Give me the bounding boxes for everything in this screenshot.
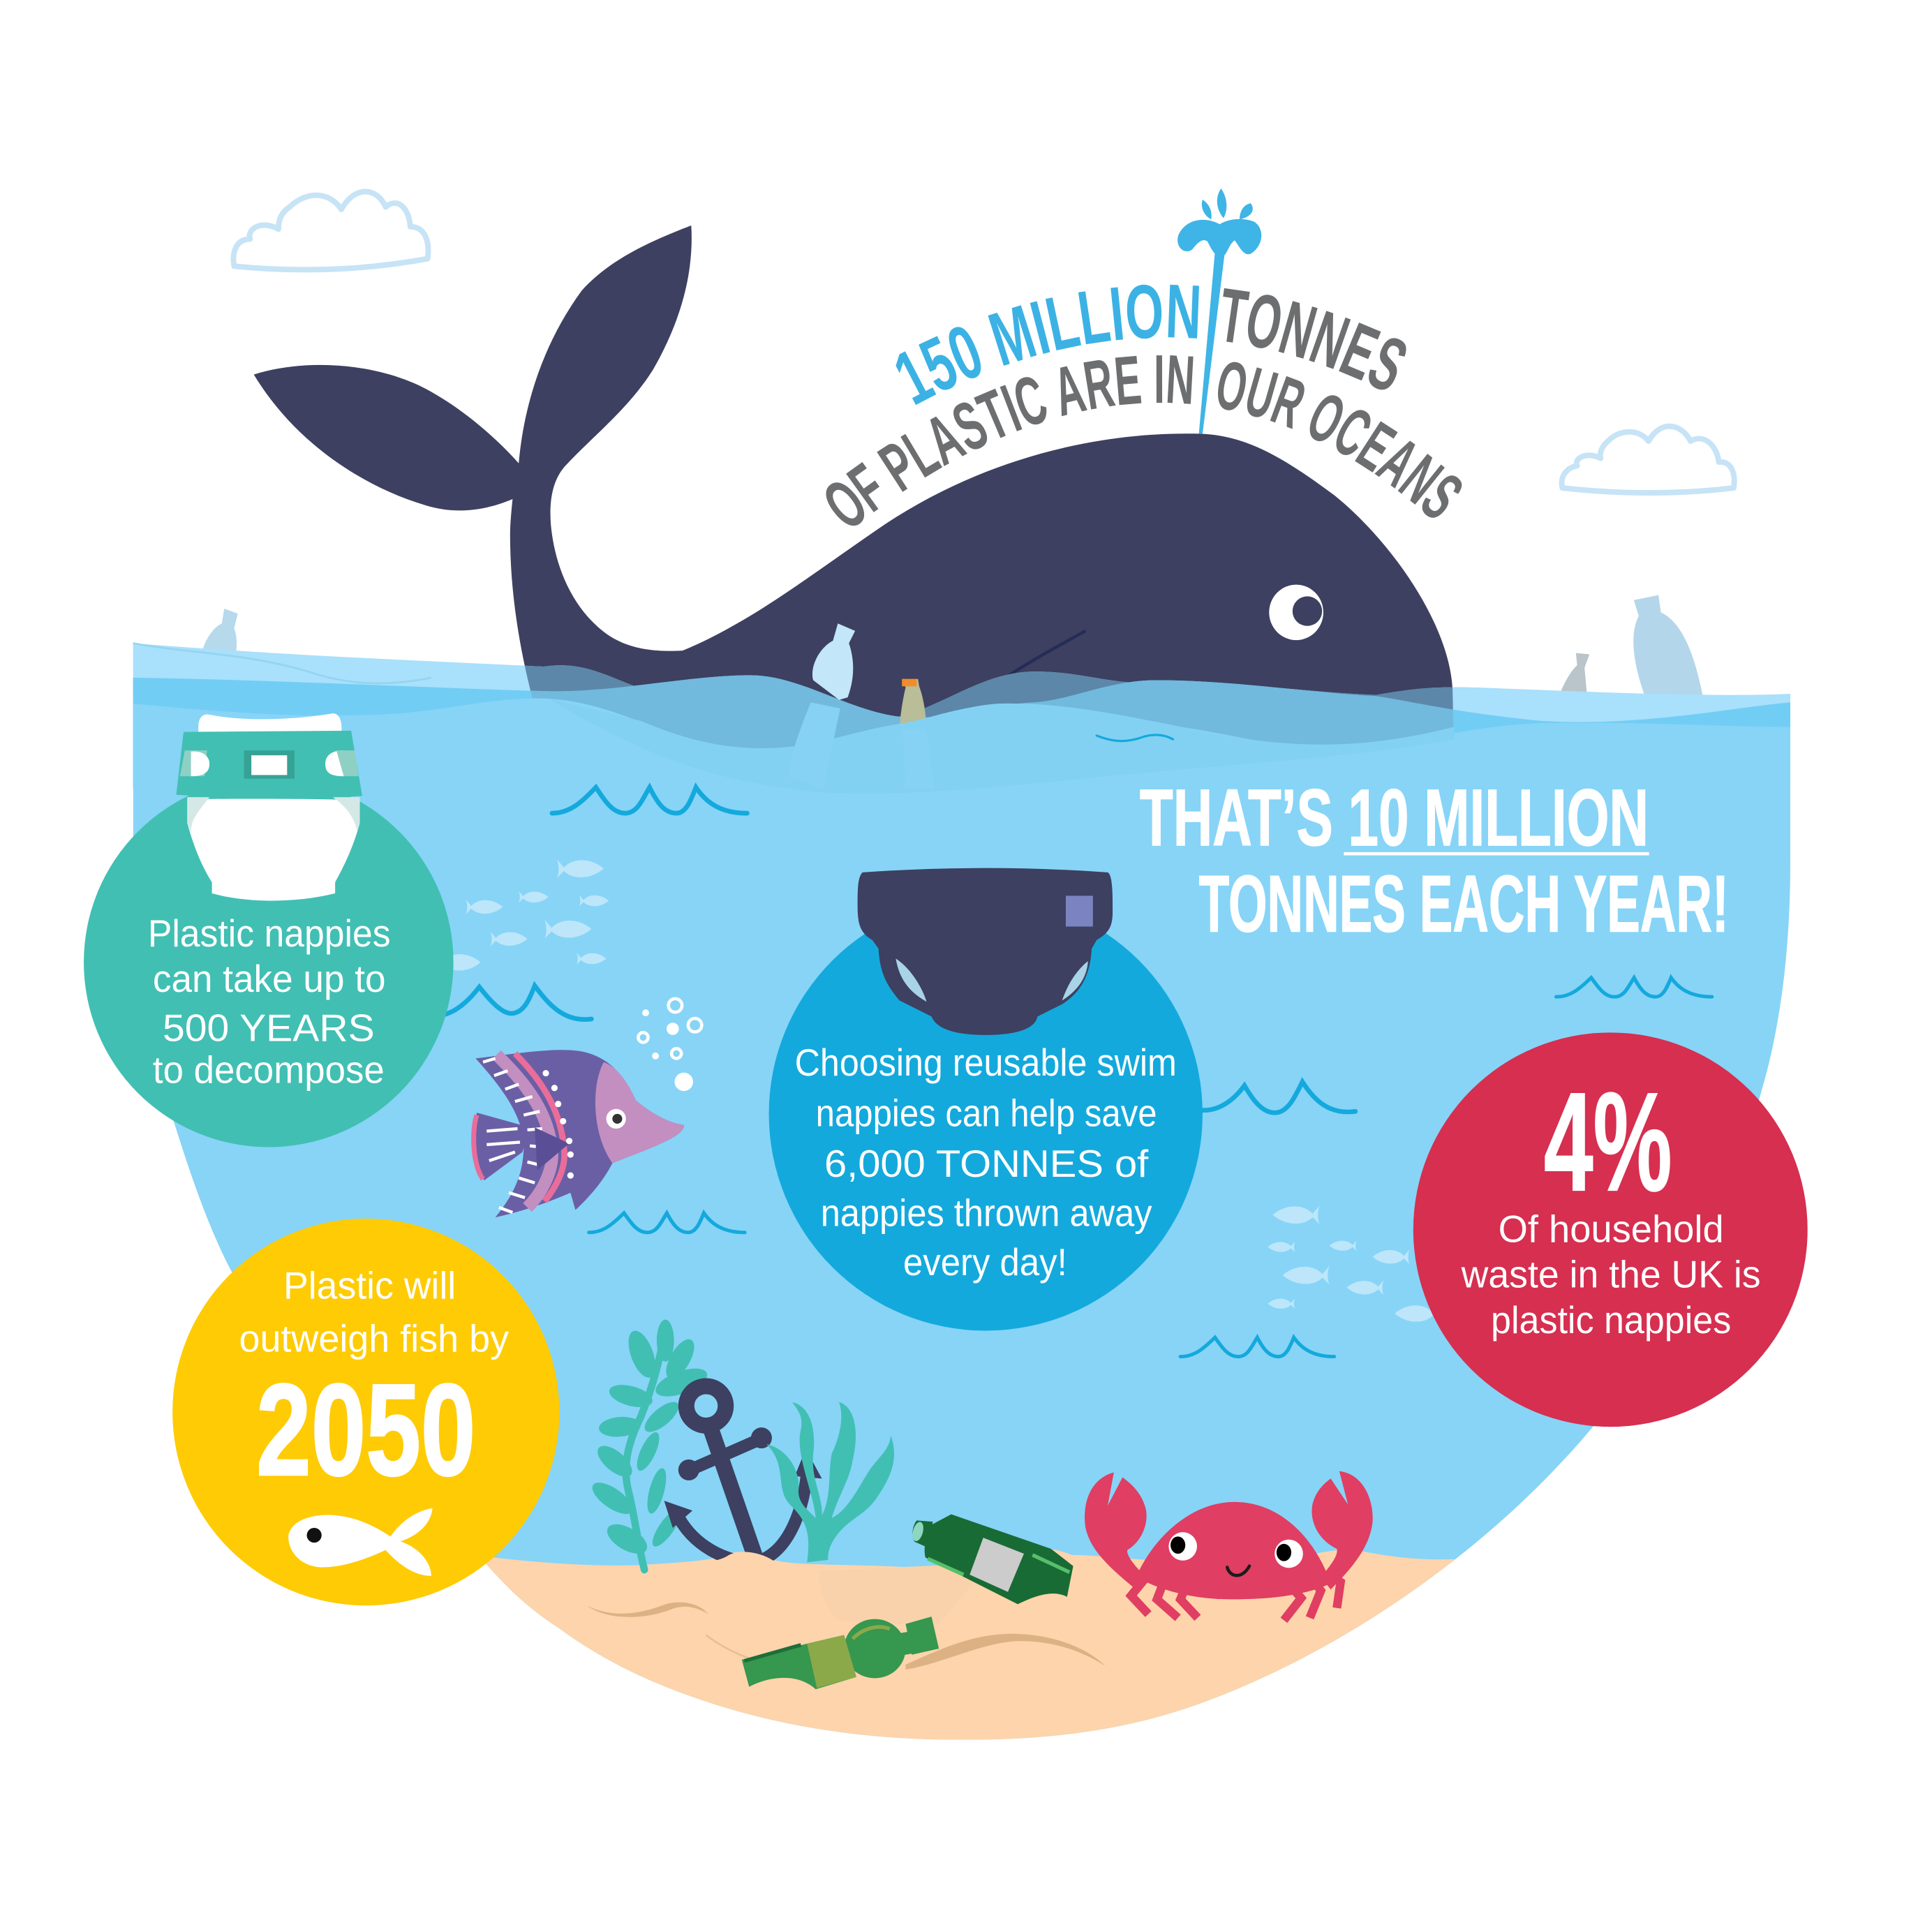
whale [254, 225, 1454, 752]
anchor [664, 1386, 822, 1562]
figure: 2050: 2050 [256, 1357, 475, 1503]
cloud left [234, 192, 428, 269]
text: choosing reusable swim nappies: every day! [903, 1240, 1067, 1284]
headline: 150 million tonnes of plastic are in our oceans: OUR OCEANS [1218, 362, 1462, 518]
panel: reusable swim nappies [769, 868, 1203, 1331]
text: choosing reusable swim nappies: 6,000 TONNES of [824, 1142, 1149, 1185]
text: plastic nappies 500 years: 500 YEARS [163, 1006, 375, 1050]
text: choosing reusable swim nappies: nappies can help save [816, 1091, 1157, 1134]
text: of household waste: waste in the UK is [1461, 1253, 1761, 1296]
ripple waves [419, 735, 1712, 1357]
text: plastic will outweigh fish by [239, 1264, 510, 1360]
seaweed right [766, 1402, 894, 1562]
icon: white plastic nappy [176, 713, 362, 900]
fish school right [1268, 1205, 1439, 1323]
panel: that's 10 million tonnes each year [1140, 773, 1729, 949]
crab [1085, 1471, 1373, 1620]
water surface back layer [133, 642, 1790, 789]
text: of household waste: Of household [1499, 1207, 1724, 1250]
text: plastic will outweigh fish by: Plastic will [283, 1264, 456, 1307]
panel: 4 percent household waste [1413, 1032, 1808, 1427]
text: of household waste [1461, 1207, 1761, 1342]
figure: 4%: 4% [1544, 1063, 1672, 1220]
headline: 150 million tonnes of plastic are in our oceans: 150 MILLION [896, 285, 1199, 405]
sand [486, 1549, 1456, 1739]
text: choosing reusable swim nappies [795, 1041, 1177, 1284]
panel: 500 years decomposition [84, 713, 454, 1147]
icon: purple tropical fish [474, 1050, 684, 1217]
cloud right [1562, 426, 1734, 493]
icon: navy swim nappy [858, 868, 1113, 1035]
sand mound over anchor [690, 1552, 801, 1577]
text: choosing reusable swim nappies: nappies thrown away [821, 1191, 1152, 1234]
water surface middle layer [133, 675, 1790, 789]
icon: white fish [288, 1508, 433, 1576]
dark green bottle [911, 1515, 1073, 1604]
text: choosing reusable swim nappies: Choosing reusable swim [795, 1041, 1177, 1084]
headline: 150 million tonnes of plastic are in our oceans: OF PLASTIC ARE IN [826, 355, 1194, 526]
infographic [84, 188, 1808, 1739]
text: plastic nappies 500 years [148, 912, 391, 1092]
text: plastic nappies 500 years: Plastic nappies [148, 912, 391, 955]
sea body [133, 699, 1790, 1750]
light green bottle [742, 1617, 939, 1689]
text: plastic nappies 500 years: can take up to [153, 957, 386, 1000]
text: plastic will outweigh fish by: outweigh fish by [239, 1317, 510, 1360]
bottle at the whale [812, 623, 927, 727]
floating bottles above the water [197, 595, 1703, 708]
seaweed left [588, 1320, 711, 1570]
whale spout [1177, 188, 1261, 433]
headline: 150 million tonnes of plastic are in our oceans: TONNES [1223, 288, 1406, 389]
fish school left [436, 859, 609, 971]
panel: plastic will outweigh fish by 2050 [172, 1219, 559, 1605]
panel: that's 10 million tonnes each year: THAT’S 10 MILLION [1140, 773, 1649, 863]
bubbles [638, 999, 701, 1091]
text: plastic nappies 500 years: to decompose [153, 1048, 385, 1092]
text: of household waste: plastic nappies [1491, 1298, 1731, 1342]
headline: 150 million tonnes of plastic are in our oceans [826, 285, 1462, 526]
